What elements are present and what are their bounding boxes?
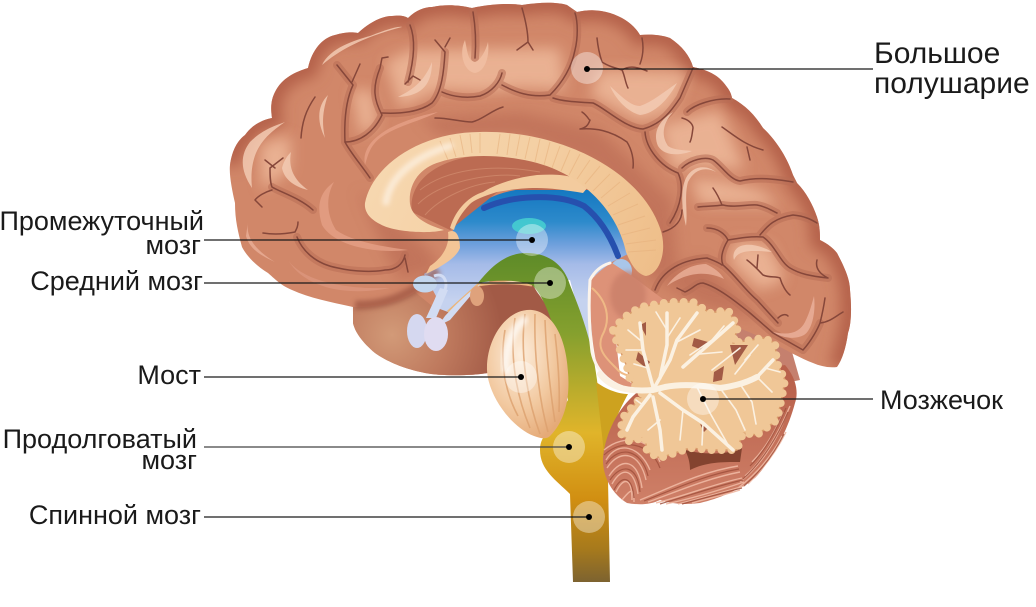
frontal lobe dark underside: [355, 270, 438, 305]
pituitary right: [424, 317, 448, 351]
label: diencephalon: Промежуточный: [0, 206, 204, 236]
callosum highlight: [386, 146, 450, 202]
peduncle: [596, 382, 628, 462]
gyrus highlights: [243, 27, 815, 338]
dark fold: [685, 448, 742, 470]
arbor vitae: [613, 302, 785, 458]
teal blob: [512, 218, 546, 234]
basal lobe: [353, 283, 556, 375]
pituitary left: [407, 314, 427, 348]
label: pons: Мост: [137, 360, 201, 390]
pons highlight: [506, 320, 524, 370]
small bump: [470, 286, 484, 306]
pons body: [487, 310, 568, 438]
label: cerebrum: [584, 37, 1030, 100]
label: cerebellum: [700, 385, 1003, 415]
ring: [434, 275, 446, 290]
label: medulla: Продолговатый: [3, 424, 197, 454]
dark blue arc: [484, 197, 618, 256]
recess: [413, 276, 437, 292]
label: medulla: [3, 424, 572, 475]
callosum fibres: [440, 133, 656, 252]
label: medulla: мозг: [141, 445, 197, 475]
edge shading: [230, 3, 851, 367]
tissue beside stem: [590, 263, 667, 392]
label: diencephalon: [0, 206, 535, 260]
darker inner zones: [358, 112, 760, 320]
label: spinal cord: Спинной мозг: [29, 500, 201, 530]
sulci lines: [255, 8, 843, 350]
arbor gaps: [636, 322, 748, 432]
label: spinal cord: [29, 500, 592, 530]
pons: [487, 310, 568, 438]
wavy line: [592, 288, 636, 380]
stalk: [426, 288, 448, 318]
marker halos: [505, 52, 719, 533]
brain illustration: [220, 0, 860, 582]
cerebellum muscle layer: [603, 365, 797, 504]
cerebrum: [220, 0, 860, 380]
white boundary: [589, 263, 640, 391]
label: midbrain: Средний мозг: [30, 266, 203, 296]
folia stripes: [604, 406, 790, 504]
pons stripes: [503, 314, 559, 434]
pineal bulb: [610, 259, 632, 283]
label: diencephalon: мозг: [145, 230, 201, 260]
anterior commissure: [426, 231, 460, 274]
lighter inner gyri: [260, 48, 785, 290]
third ventricle region: [424, 186, 628, 362]
label: cerebrum: полушарие: [874, 67, 1030, 100]
arbor branches: [600, 312, 780, 450]
cerebellum: [600, 302, 797, 504]
label: cerebrum: Большое: [874, 37, 1000, 70]
label: midbrain: [30, 266, 553, 296]
label: cerebellum: Мозжечок: [880, 385, 1003, 415]
fluid channels: [407, 259, 632, 351]
tissue shade: [610, 271, 646, 319]
channel to pituitary: [438, 277, 492, 326]
gyrus fold shading: [272, 12, 828, 350]
corpus callosum: [365, 132, 663, 276]
cream band: [448, 283, 532, 312]
label: pons: [137, 360, 524, 390]
backing behind cerebellum: [620, 280, 800, 400]
area under corpus callosum: [412, 155, 590, 230]
brain stem: [478, 253, 610, 582]
fornix: [450, 175, 588, 230]
callosal sulcus stripes: [418, 168, 540, 215]
